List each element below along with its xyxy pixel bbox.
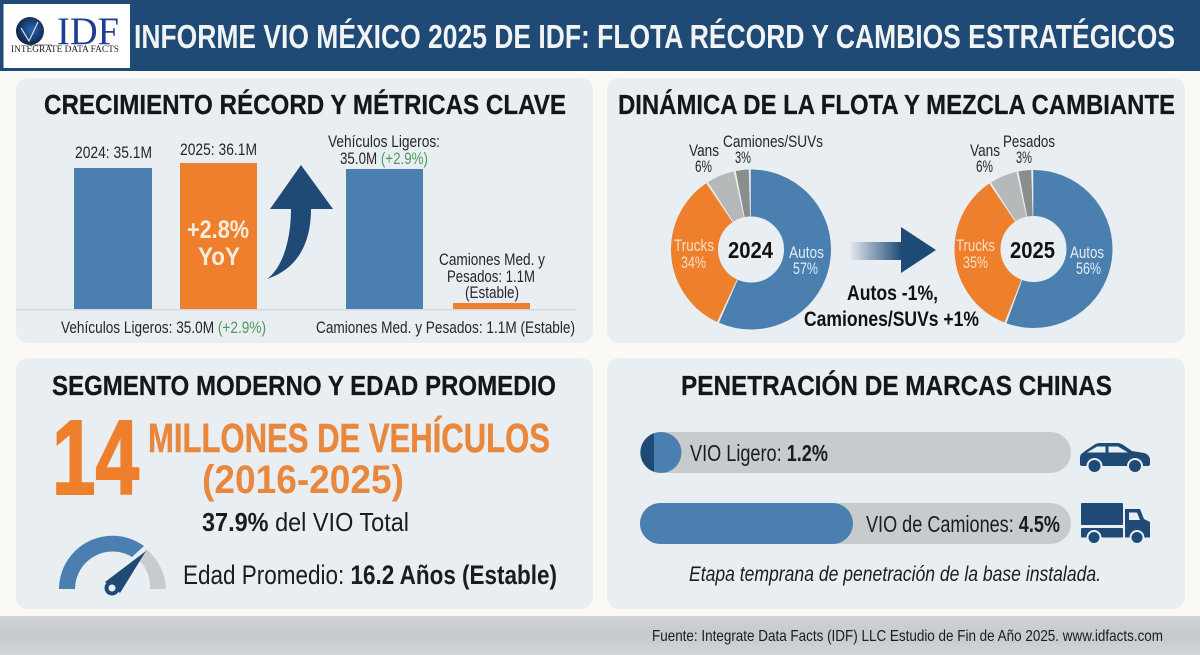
progress bar: VIO de camiones: [640, 503, 1071, 544]
icon: car: [1080, 443, 1150, 474]
donut chart 2024: Vans: [689, 142, 719, 160]
change note: Autos -1%,: [847, 282, 938, 305]
panel: segmento moderno y edad promedio: [16, 358, 593, 609]
change note: [804, 282, 979, 331]
average age: Edad Promedio: 16.2 Años (Estable): [183, 560, 557, 590]
bar chart: segments: Vehículos Ligeros:: [328, 133, 440, 151]
donut chart 2024: 57%: [793, 260, 818, 278]
panel: dinámica de la flota: [607, 78, 1185, 343]
heading: PENETRACIÓN DE MARCAS CHINAS: [681, 370, 1112, 401]
change note: Camiones/SUVs +1%: [804, 308, 979, 331]
panel: crecimiento récord y métricas clave: [16, 78, 593, 343]
donut chart 2025: 6%: [976, 158, 993, 176]
bar chart: total VIO: [16, 141, 576, 310]
progress bar: VIO ligero: [640, 432, 1071, 473]
icon: truck: [1081, 503, 1150, 545]
header banner: [0, 0, 1200, 71]
donut chart 2025: Trucks: [956, 237, 995, 255]
donut chart 2024: Camiones/SUVs: [723, 133, 823, 151]
logo: IDF: [4, 4, 130, 68]
panel: penetración de marcas chinas: [607, 358, 1185, 609]
bar chart: total VIO: YoY: [198, 243, 240, 271]
donut chart 2025: 35%: [963, 254, 988, 272]
donut chart 2025: Pesados: [1003, 133, 1055, 151]
note: Etapa temprana de penetración de la base instalada.: [689, 563, 1101, 586]
bar chart: segments: (Estable): [465, 284, 519, 302]
share of total: 37.9% del VIO Total: [202, 507, 409, 537]
donut chart 2025: 3%: [1016, 149, 1032, 167]
donut chart 2024: 3%: [735, 149, 751, 167]
bar chart: total VIO: 2024: 35.1M: [75, 144, 152, 162]
arrow: growth: [267, 165, 333, 279]
donut chart 2025: Autos: [1070, 244, 1104, 262]
arrow: transition: [850, 227, 936, 273]
donut chart 2024: 2024: [728, 237, 773, 263]
progress bar: VIO ligero: VIO Ligero: 1.2%: [690, 440, 828, 466]
donut chart 2025: [956, 133, 1104, 305]
icon: gauge: [59, 536, 166, 596]
big label: millones de vehículos: MILLONES DE VEHÍCULOS: [148, 415, 550, 461]
bar chart: segments: Pesados: 1.1M: [447, 268, 535, 286]
axis label: ligeros: Vehículos Ligeros: 35.0M (+2.9%): [61, 319, 266, 337]
axis label: camiones: Camiones Med. y Pesados: 1.1M (Estable): [316, 319, 575, 337]
big label: millones de vehículos: [148, 415, 550, 502]
progress bar: VIO de camiones: VIO de Camiones: 4.5%: [866, 511, 1060, 537]
logo: IDF: IDF: [57, 10, 119, 53]
donut chart 2024: 34%: [681, 254, 706, 272]
heading: CRECIMIENTO RÉCORD Y MÉTRICAS CLAVE: [44, 89, 566, 120]
donut chart 2025: 56%: [1076, 260, 1101, 278]
donut chart 2024: 6%: [695, 158, 712, 176]
bar chart: segments: [328, 133, 546, 309]
logo: IDF: INTEGRATE DATA FACTS: [11, 44, 119, 54]
heading: SEGMENTO MODERNO Y EDAD PROMEDIO: [52, 370, 556, 401]
donut chart 2024: [674, 133, 824, 306]
bar chart: total VIO: +2.8%: [187, 216, 249, 244]
donut chart 2025: 2025: [1010, 237, 1055, 263]
bar chart: segments: 35.0M (+2.9%): [340, 150, 428, 168]
big number: 14: 14: [52, 399, 139, 517]
bar chart: segments: Camiones Med. y: [439, 251, 546, 269]
bar chart: total VIO: 2025: 36.1M: [180, 141, 257, 159]
donut chart 2024: Autos: [789, 244, 824, 262]
donut chart 2024: Trucks: [674, 237, 714, 255]
big label: millones de vehículos: (2016-2025): [202, 458, 404, 502]
footer: [0, 616, 1200, 655]
donut chart 2025: Vans: [970, 142, 1000, 160]
